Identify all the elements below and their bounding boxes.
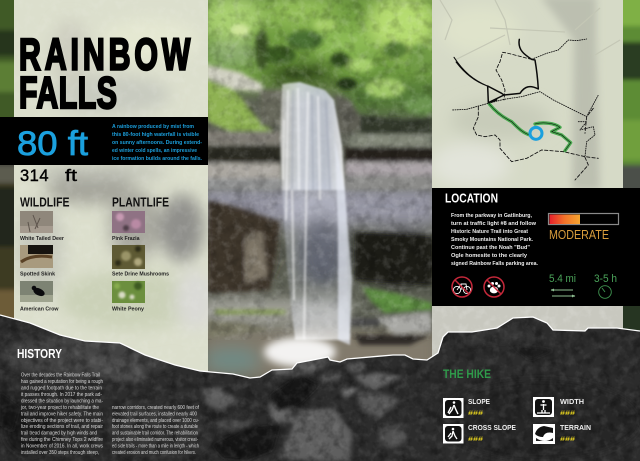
rainbow description: this 80-foot high waterfall is visible: [112, 132, 199, 138]
the hike section: [443, 367, 591, 444]
width rating: [560, 397, 584, 417]
photo: white peony: [112, 281, 145, 303]
photo: spotted skink: [20, 245, 53, 268]
rainbow description: ice formation builds around the falls.: [112, 156, 202, 162]
label: pink frazia: Pink Frazia: [112, 236, 140, 242]
cross slope rating: CROSS SLOPE: [468, 423, 516, 432]
rock foreground: [0, 300, 640, 461]
directions: Smoky Mountains National Park.: [451, 237, 533, 243]
icon: slope: [443, 398, 464, 418]
history text column 1: [20, 372, 103, 456]
wildlife column: [20, 194, 70, 312]
location heading: LOCATION: [445, 192, 498, 206]
terrain rating: [560, 423, 591, 443]
history text column 1: jor, two-year project to rehabilitate the: [20, 405, 99, 411]
directions: [451, 213, 538, 267]
directions: From the parkway in Gatlinburg,: [451, 213, 532, 219]
waterfall: [280, 82, 352, 345]
dashed trails: [473, 52, 598, 180]
plunge mist: [264, 337, 336, 367]
terrain rating: TERRAIN: [560, 423, 591, 432]
the hike heading: THE HIKE: [443, 367, 491, 381]
history text column 1: it passes through. In 2017 the park ad-: [21, 392, 102, 398]
height in metric label: 314: [20, 167, 48, 185]
history text column 1: trail and improve hiker safety. The main: [21, 412, 103, 418]
history text column 1: installed over 350 steps through steep,: [21, 450, 99, 456]
label: spotted skink: Spotted Skink: [20, 272, 56, 278]
label: white peony: White Peony: [112, 306, 145, 312]
photo: american crow: [20, 281, 53, 302]
history text column 2: project also eliminated numerous, visitor creat-: [112, 437, 198, 443]
title: FALLS: [19, 69, 117, 119]
history text column 2: foot stones along the route to create a durable: [112, 424, 198, 430]
history text column 1: lize eroding sections of trail, and repair: [21, 424, 103, 430]
history text column 2: drainage elements, and placed over 1000 cu-: [112, 418, 199, 424]
right photo strip: [623, 0, 640, 330]
plantlife column: [112, 194, 169, 312]
cross slope rating: ###: [468, 436, 484, 443]
foliage clumps: [255, 30, 269, 70]
plantlife heading: PLANTLIFE: [112, 194, 169, 210]
history text column 1: dressed the situation by launching a ma-: [21, 398, 103, 404]
history text column 1: and rugged footpath due to the terrain: [21, 386, 102, 392]
label: sete drine mushrooms: Sete Drine Mushrooms: [112, 272, 169, 278]
wildlife heading: WILDLIFE: [20, 194, 70, 210]
icon: no bikes: [452, 277, 472, 297]
height in metric label: ft: [65, 167, 78, 185]
icon: no pets: [484, 277, 504, 297]
time: [594, 273, 617, 298]
dotted trails: [453, 39, 598, 157]
directions: turn at traffic light #8 and follow: [451, 221, 537, 227]
history text column 2: elevated trail surfaces, installed nearly 400: [112, 412, 197, 418]
history text column 1: trail tread damaged by high winds and: [21, 430, 97, 436]
height banner: [0, 117, 208, 165]
history text column 2: and sustainable trail corridor. The rehabilitation: [112, 430, 198, 436]
label: american crow: American Crow: [20, 306, 59, 312]
history text column 1: has gained a reputation for being a rough: [21, 379, 103, 385]
icon: terrain: [533, 424, 555, 444]
location panel: [432, 188, 640, 306]
history section: [17, 346, 200, 456]
directions: signed Rainbow Falls parking area.: [451, 261, 538, 267]
distance: [549, 273, 576, 297]
directions: Continue past the Noah "Bud": [451, 245, 530, 251]
slope rating: SLOPE: [468, 397, 490, 406]
terrain rating: ###: [560, 436, 576, 443]
photo: white tailed deer: [20, 211, 53, 233]
history text column 1: Over the decades the Rainbow Falls Trail: [21, 372, 100, 378]
icon: width: [533, 397, 554, 417]
label: white tailed deer: White Tailed Deer: [20, 236, 65, 242]
left translucent panel: [14, 0, 215, 380]
rainbow description: on sunny afternoons. During extend-: [112, 140, 202, 146]
slope rating: [468, 397, 490, 417]
rainbow description: [112, 124, 202, 162]
history text column 2: created erosion and much confusion for hikers.: [112, 450, 196, 456]
distance: 5.4 mi: [549, 273, 576, 285]
trail map: [453, 39, 598, 180]
title: [19, 31, 190, 119]
directions: Ogle homesite to the clearly: [451, 253, 528, 259]
time: 3-5 h: [594, 273, 617, 285]
right map panel: [430, 0, 623, 190]
icon: cross slope: [443, 424, 464, 444]
difficulty label: MODERATE: [549, 227, 609, 242]
directions: Historic Nature Trail into Great: [451, 229, 528, 235]
rainbow description: ed winter cold spells, an impressive: [112, 148, 197, 154]
rainbow description: A rainbow produced by mist from: [112, 124, 194, 130]
difficulty gauge: [548, 214, 618, 224]
falls location marker: [530, 127, 542, 139]
left photo strip: [0, 0, 14, 318]
height in feet: 80 ft: [17, 125, 88, 163]
photo: pink frazia: [112, 211, 145, 233]
photo: sete drine mushrooms: [112, 245, 145, 269]
history text column 2: [112, 405, 200, 456]
waterfall photo: [208, 0, 432, 378]
light strip under location panel: [432, 306, 623, 366]
slope rating: ###: [468, 410, 484, 417]
history text column 2: narrow corridors, created nearly 600 feet of: [112, 405, 200, 411]
history text column 1: in November of 2016. In all, work crews: [21, 444, 103, 450]
history text column 1: fire during the Chimney Tops 2 wildfire: [21, 437, 103, 443]
width rating: ###: [560, 410, 576, 417]
width rating: WIDTH: [560, 397, 584, 406]
hike route highlight: [489, 104, 571, 151]
torn white edge of rocks: [0, 315, 640, 378]
history text column 1: objectives of the project were to stabi-: [21, 418, 103, 424]
title: RAINBOW: [19, 31, 190, 80]
roads: [454, 39, 571, 151]
history heading: HISTORY: [17, 346, 62, 361]
cross slope rating: [468, 423, 516, 443]
history text column 2: ed side trails - more than a mile in length - which: [112, 444, 199, 450]
height in metric label: [20, 167, 78, 185]
